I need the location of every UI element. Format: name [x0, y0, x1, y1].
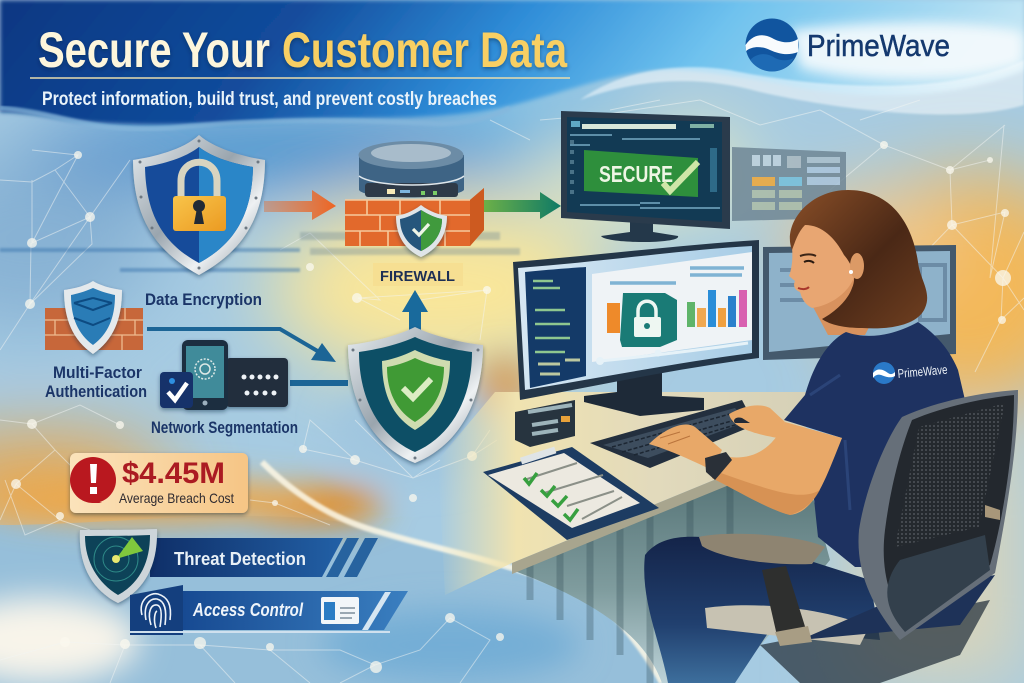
third monitor behind: [763, 245, 956, 360]
title: Customer Data: [282, 22, 568, 78]
secure monitor: [561, 111, 730, 242]
t-shirt: [784, 322, 965, 567]
icon: green shield: [348, 327, 483, 463]
main monitor: [513, 240, 759, 416]
shirt logo: PrimeWave: [897, 363, 948, 381]
icon: blue encryption shield: [133, 135, 265, 275]
icon: alert bubble: [70, 457, 116, 503]
server: [358, 141, 464, 198]
chart bars: [607, 290, 747, 333]
chair base: [760, 600, 990, 683]
firewall label: FIREWALL: [380, 268, 455, 285]
arm: [712, 422, 842, 515]
panel: threat detection: Threat Detection: [174, 549, 306, 569]
office chair: [699, 390, 1018, 683]
brick wall: [345, 188, 484, 246]
connector lines and blue arrows: [147, 290, 428, 383]
label: data encryption: Data Encryption: [145, 291, 262, 309]
checklist: [524, 463, 622, 520]
blue lower swoosh: [0, 516, 662, 683]
shield: [64, 281, 122, 354]
panel: access control: [130, 585, 408, 635]
subtitle: Protect information, build trust, and prevent costly breaches: [42, 89, 497, 110]
person: [644, 190, 965, 683]
lock tile: [620, 293, 677, 347]
title underline: [30, 77, 570, 79]
monitor stand: [601, 222, 678, 242]
phone: [182, 340, 228, 410]
chair seat: [705, 605, 869, 645]
trousers: [644, 537, 880, 683]
top header band: [0, 0, 1024, 124]
white ribbon: [580, 60, 1024, 115]
label: multi-factor authentication: Multi-Factor: [53, 364, 143, 382]
callout: average breach cost: [70, 453, 248, 513]
face: [789, 221, 857, 308]
chair mesh: [895, 403, 1005, 547]
monitor stand: [584, 372, 704, 416]
panel: access control: Access Control: [192, 600, 304, 620]
logo: [746, 18, 950, 72]
armrest post: [762, 566, 808, 640]
watch: [705, 452, 732, 480]
logo: PrimeWave: [807, 28, 950, 63]
hair: [790, 190, 927, 328]
armrest: [699, 534, 825, 564]
title: Secure Your: [38, 22, 270, 78]
small desk device: [515, 400, 575, 447]
hands: [649, 424, 722, 470]
label: multi-factor authentication: [45, 364, 147, 401]
label: network segmentation: Network Segmentation: [151, 419, 298, 437]
white swoosh edge: [262, 462, 662, 683]
clipboard: [483, 447, 659, 540]
shield badge: [396, 205, 447, 257]
title: [38, 22, 568, 78]
secure banner: [584, 150, 698, 197]
arrow: orange: [264, 190, 336, 220]
panel: threat detection: [80, 529, 378, 603]
firewall label: [373, 263, 463, 286]
icon: phone and passcode: [160, 340, 288, 410]
icon: id card: [321, 597, 359, 624]
chair back frame: [858, 390, 1018, 640]
desk underside: [512, 450, 830, 683]
secure banner: SECURE: [599, 161, 673, 187]
icon: radar shield: [80, 529, 157, 603]
server on firewall: [345, 141, 484, 257]
arrow: green: [484, 192, 561, 219]
icon: fingerprint: [141, 594, 170, 628]
label: multi-factor authentication: Authentication: [45, 383, 147, 401]
padlock: [173, 162, 226, 231]
keyboard: [590, 400, 755, 468]
check tile: [160, 372, 193, 408]
shirt logo: [873, 362, 948, 384]
callout: average breach cost: Average Breach Cost: [119, 490, 234, 506]
bricks: [45, 308, 143, 350]
rear dashboard panel: [732, 147, 846, 221]
passcode panel: [226, 358, 288, 407]
neck: [812, 262, 878, 335]
shelves: [300, 232, 520, 255]
callout: average breach cost: $4.45M: [122, 457, 225, 490]
small data shield on bricks: [45, 281, 143, 354]
desk: [438, 392, 830, 683]
